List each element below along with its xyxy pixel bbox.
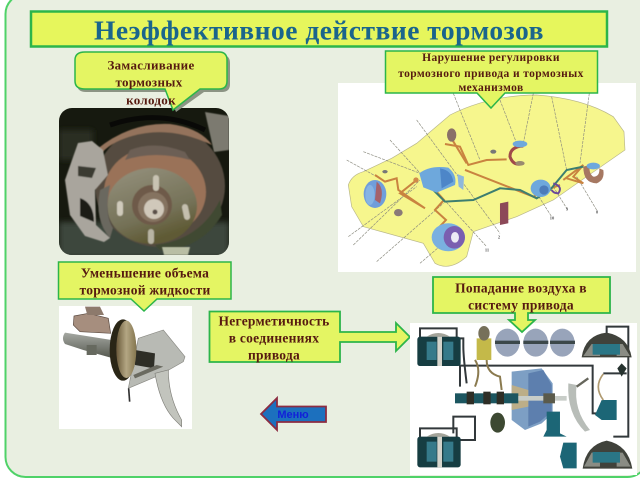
title banner: Неэффективное действие тормозов bbox=[94, 14, 544, 46]
push rod bbox=[135, 350, 155, 368]
master cylinder rod bbox=[455, 393, 518, 403]
reservoir bbox=[73, 313, 111, 333]
callout with down arrow: air in the drive system bbox=[433, 277, 610, 332]
pedal bbox=[568, 383, 590, 432]
wheel hub bbox=[107, 168, 197, 244]
small cylinders bbox=[543, 400, 617, 468]
callout with down arrow: air in the drive system: систему привода bbox=[468, 298, 574, 312]
pedal bbox=[155, 370, 182, 427]
callout with arrow: leaks in drive joints: Негерметичность bbox=[218, 314, 330, 328]
reservoir bbox=[477, 338, 491, 360]
callout: brake fluid volume decrease: Уменьшение объема bbox=[81, 266, 209, 280]
hydraulic lines bbox=[420, 327, 628, 440]
diagram: car brake system bbox=[338, 83, 636, 272]
diagram: car brake system: 10 bbox=[550, 216, 555, 220]
diagram: car brake system: 9 bbox=[566, 206, 569, 212]
small parts bbox=[382, 128, 508, 225]
three small boosters bbox=[495, 329, 575, 357]
callout: oiling of brake pads bbox=[75, 52, 230, 112]
photo: brake disc bbox=[59, 108, 229, 258]
car body outline bbox=[348, 95, 625, 266]
callout with arrow: leaks in drive joints: в соединениях bbox=[229, 330, 319, 346]
diagram: hydraulic drive scheme bbox=[410, 323, 637, 475]
title banner bbox=[31, 12, 607, 46]
front-left wheel brake bbox=[364, 180, 386, 208]
menu button arrow bbox=[261, 398, 326, 430]
callout: brake drive adjustment fault: тормозного привода и тормозных bbox=[398, 68, 584, 80]
front calipers bbox=[417, 333, 461, 366]
brake caliper bbox=[65, 141, 113, 242]
diagram: car brake system: 8 bbox=[596, 210, 599, 214]
image: master cylinder and pedal bbox=[59, 306, 192, 429]
callout with down arrow: air in the drive system: Попадание воздуха в bbox=[455, 280, 587, 296]
rear-left wheel brake bbox=[583, 163, 604, 183]
pressure regulator bbox=[531, 180, 560, 197]
callout: brake fluid volume decrease: тормозной жидкости bbox=[79, 282, 211, 298]
callout: oiling of brake pads: Замасливание bbox=[107, 58, 195, 72]
front-right wheel brake bbox=[432, 223, 465, 251]
callout: brake drive adjustment fault: Нарушение регулировки bbox=[422, 52, 560, 64]
callout: brake drive adjustment fault bbox=[386, 51, 598, 108]
callout: oiling of brake pads: колодок bbox=[126, 92, 176, 108]
main booster bbox=[512, 368, 553, 430]
rear-right wheel brake bbox=[510, 141, 527, 166]
callout: brake drive adjustment fault: механизмов bbox=[458, 82, 524, 94]
pedal bracket bbox=[128, 330, 185, 388]
callout with arrow: leaks in drive joints: привода bbox=[248, 348, 300, 362]
master cylinder bbox=[413, 167, 464, 193]
callout with arrow: leaks in drive joints bbox=[210, 312, 410, 362]
diagram: car brake system: 2 bbox=[498, 234, 501, 240]
master cylinder body bbox=[63, 333, 113, 358]
callout: oiling of brake pads: тормозных bbox=[116, 74, 183, 90]
vacuum booster bbox=[110, 319, 136, 381]
pointer lines bbox=[347, 93, 597, 263]
diagram: car brake system: 11 bbox=[485, 248, 490, 252]
callout: brake fluid volume decrease bbox=[58, 262, 231, 311]
brake disc bbox=[95, 124, 225, 250]
brake lines bbox=[375, 133, 583, 230]
rear drums bbox=[582, 333, 632, 357]
menu button arrow: Меню bbox=[277, 409, 309, 421]
